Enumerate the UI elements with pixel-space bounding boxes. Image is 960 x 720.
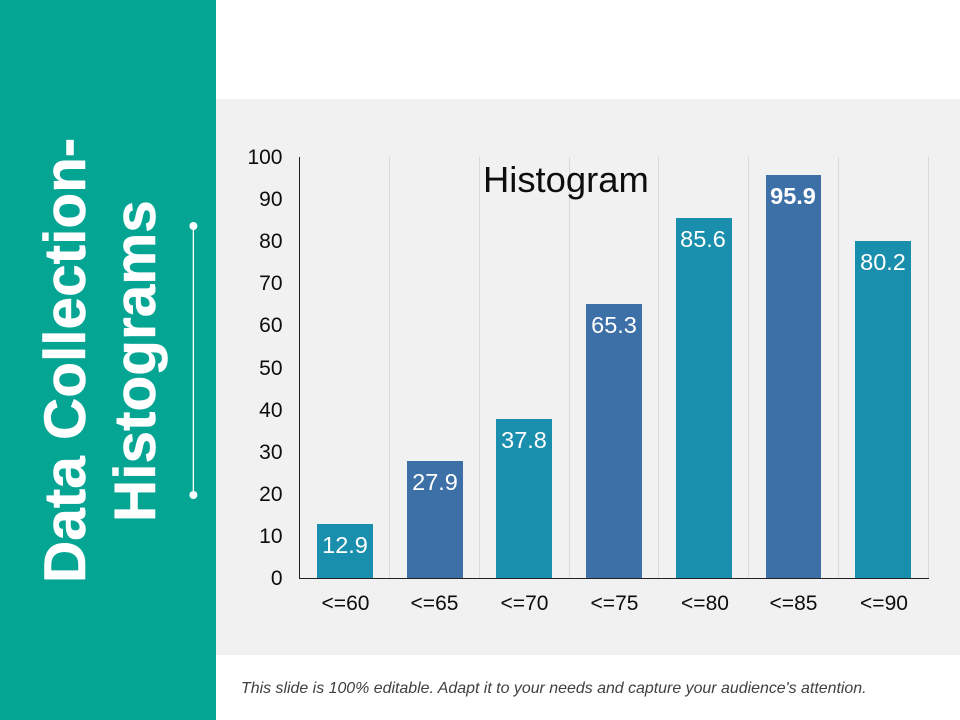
chart: histogram	[247, 146, 929, 615]
bars	[317, 175, 911, 578]
x axis labels: <=65	[411, 592, 458, 615]
y axis labels: 80	[259, 230, 282, 253]
y axis labels: 50	[259, 357, 282, 380]
y axis labels: 10	[259, 525, 282, 548]
y axis labels: 20	[259, 483, 282, 506]
x axis labels: <=70	[501, 592, 548, 615]
heading: slide title: Data Collection-	[33, 138, 98, 583]
x axis labels: <=90	[860, 592, 908, 615]
bar value labels: 95.9	[770, 183, 816, 209]
y axis labels	[247, 146, 282, 590]
bar value labels	[322, 183, 906, 558]
heading: slide title: Histograms	[103, 200, 168, 522]
y axis labels: 90	[259, 188, 282, 211]
decorative connector with end dots	[189, 222, 197, 499]
y axis labels: 70	[259, 272, 282, 295]
x axis labels: <=85	[770, 592, 817, 615]
bar value labels: 12.9	[322, 532, 368, 558]
bar value labels: 80.2	[860, 249, 906, 275]
x axis labels	[322, 592, 908, 615]
y axis labels: 0	[271, 567, 282, 590]
panel: chart background	[216, 99, 960, 655]
x axis labels: <=80	[681, 592, 729, 615]
y axis labels: 100	[247, 146, 282, 169]
chart title: Histogram	[483, 159, 649, 200]
bar value labels: 65.3	[591, 312, 637, 338]
heading: slide title	[33, 138, 168, 583]
bar value labels: 85.6	[680, 226, 726, 252]
axes	[299, 157, 929, 578]
footer note: This slide is 100% editable. Adapt it to your needs and capture your audience's attention.	[241, 680, 867, 697]
bar value labels: 27.9	[412, 469, 458, 495]
bar value labels: 37.8	[501, 427, 547, 453]
y axis labels: 30	[259, 441, 282, 464]
x axis labels: <=75	[591, 592, 638, 615]
y axis labels: 40	[259, 399, 282, 422]
y axis labels: 60	[259, 314, 282, 337]
x axis labels: <=60	[322, 592, 369, 615]
panel: teal sidebar	[0, 0, 216, 720]
